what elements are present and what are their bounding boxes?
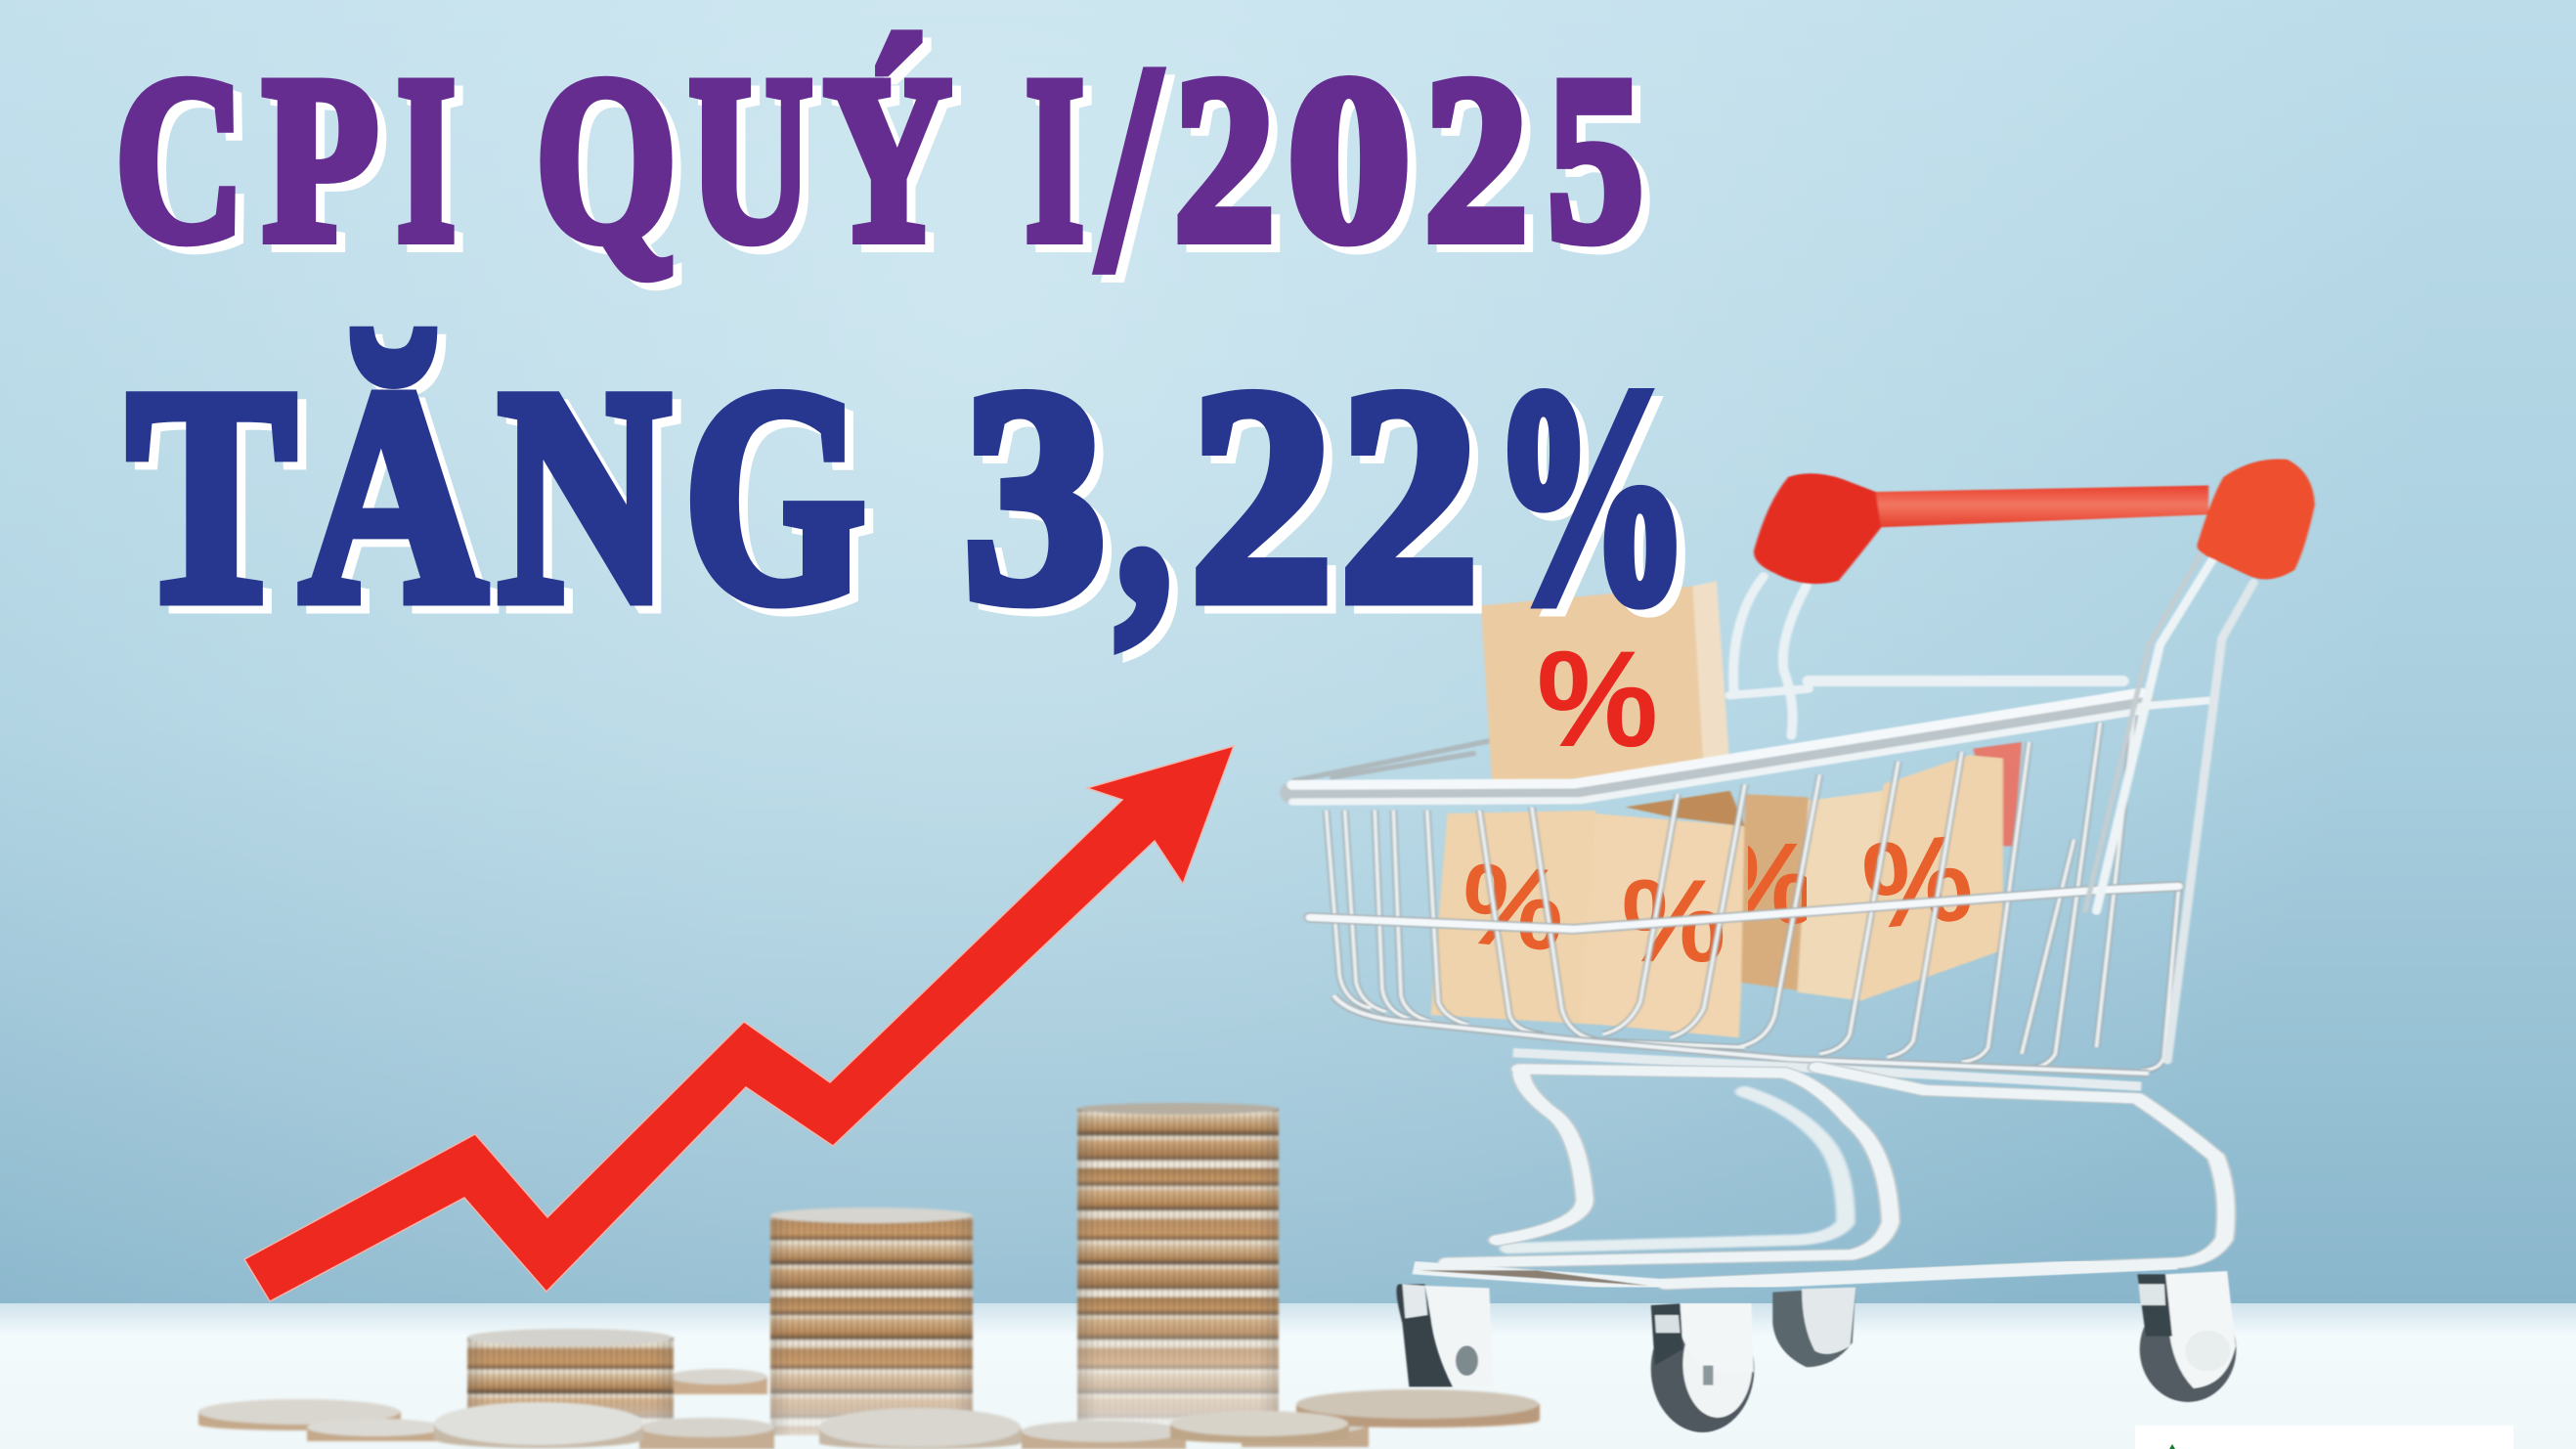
title line 2: % bbox=[1492, 328, 1690, 665]
dark top of lower boxes bbox=[1625, 791, 1745, 826]
title line 2 white shadow: , bbox=[1125, 335, 1181, 673]
right handle posts bbox=[2085, 553, 2253, 1061]
title line 1 white shadow: 5 bbox=[1556, 36, 1652, 298]
red rising arrow bbox=[244, 746, 1234, 1301]
short coin stack bbox=[467, 1329, 674, 1426]
title line 2: Ă bbox=[301, 328, 486, 665]
coin behind stacks bbox=[670, 1369, 767, 1394]
title line 2: 2 bbox=[1191, 328, 1332, 665]
title line 2 white shadow: 3 bbox=[973, 335, 1114, 673]
wood block right side bbox=[1797, 791, 1883, 1000]
small green mark bbox=[2169, 1444, 2175, 1449]
title line 1 white shadow: U bbox=[698, 36, 821, 298]
title line 1 white shadow: 2 bbox=[1183, 36, 1284, 298]
title line 2: , bbox=[1116, 328, 1172, 665]
basket rails bbox=[1292, 692, 2208, 929]
title line 1 white shadow: I bbox=[1034, 36, 1093, 298]
wood block back bbox=[1741, 794, 1809, 990]
title line 1: P bbox=[263, 28, 378, 290]
wheel front centre bbox=[1651, 1303, 1754, 1432]
title line 2: 2 bbox=[1340, 328, 1478, 665]
tall coin stack bbox=[1077, 1103, 1279, 1424]
title line 1: I bbox=[1026, 28, 1084, 290]
coin stacks bbox=[467, 1103, 1279, 1435]
title line 1 white shadow: Q bbox=[545, 36, 685, 298]
percent labels on wood blocks: % bbox=[1856, 810, 1979, 955]
white footer patch bbox=[2135, 1426, 2513, 1449]
wheel rear left bbox=[1396, 1284, 1493, 1386]
percent labels on wood blocks: % bbox=[1537, 622, 1658, 775]
shopping cart bbox=[1292, 459, 2315, 1432]
title line 2 white shadow: G bbox=[693, 335, 874, 673]
title line 1: C bbox=[115, 28, 244, 290]
title line 1: 2 bbox=[1174, 28, 1275, 290]
title line 2 white shadow: T bbox=[137, 335, 304, 673]
percent labels on wood blocks: % bbox=[1715, 819, 1816, 948]
tan box with percent, top bbox=[1481, 581, 1730, 784]
middle coin stack bbox=[770, 1208, 973, 1435]
wood block centre bbox=[1581, 813, 1749, 1037]
title line 2: T bbox=[128, 328, 295, 665]
percent labels on wood blocks bbox=[1457, 622, 1979, 987]
title line 1 white shadow: Ý bbox=[833, 36, 960, 298]
title line 2 white shadow: % bbox=[1501, 335, 1699, 673]
wheel rear centre bbox=[1772, 1288, 1856, 1367]
title line 1: 2 bbox=[1424, 28, 1528, 290]
title line 1 white shadow: P bbox=[272, 36, 387, 298]
chrome frame legs bbox=[1447, 1068, 2226, 1284]
rear handle posts bbox=[1730, 577, 2122, 735]
title line 1 white shadow: C bbox=[124, 36, 253, 298]
title line 2 white shadow: 2 bbox=[1349, 335, 1487, 673]
percent labels on wood blocks: % bbox=[1622, 856, 1725, 987]
title line 2 white shadow: 2 bbox=[1200, 335, 1341, 673]
red handle bbox=[1754, 459, 2315, 584]
title line 1 white shadow: / bbox=[1106, 13, 1171, 337]
title line 1: I bbox=[397, 28, 456, 290]
title bbox=[115, 5, 1699, 673]
cart front wires and handle bbox=[1292, 459, 2315, 1086]
title line 1 white shadow: 2 bbox=[1433, 36, 1537, 298]
cart rear wires and cargo bbox=[1292, 577, 2122, 1037]
small red block behind bbox=[1973, 742, 2022, 846]
table surface bbox=[0, 1303, 2576, 1449]
rear basket rim bbox=[1292, 741, 1491, 781]
title line 1: / bbox=[1097, 5, 1162, 329]
title line 2: N bbox=[499, 328, 670, 665]
loose coins bbox=[198, 1389, 1540, 1449]
title line 1: U bbox=[689, 28, 812, 290]
title line 1: 5 bbox=[1548, 28, 1643, 290]
wheel base strut bbox=[1414, 1263, 2177, 1286]
wood block left bbox=[1431, 811, 1599, 1025]
title line 2: G bbox=[684, 328, 865, 665]
title line 2: 3 bbox=[964, 328, 1106, 665]
title line 1 white shadow: I bbox=[406, 36, 464, 298]
wood block right bbox=[1860, 755, 2003, 1000]
title line 1: Ý bbox=[824, 28, 951, 290]
title line 2 white shadow: Ă bbox=[310, 335, 495, 673]
title line 2 white shadow: N bbox=[507, 335, 678, 673]
wheel front right bbox=[2137, 1271, 2236, 1402]
cart undercarriage bbox=[1396, 1068, 2236, 1432]
title line 1 white shadow: 0 bbox=[1296, 36, 1419, 298]
title line 1: Q bbox=[536, 28, 677, 290]
title line 1: 0 bbox=[1288, 28, 1411, 290]
basket vertical wires bbox=[1326, 716, 2179, 1071]
rear centre leg, out of focus bbox=[1509, 1092, 1846, 1249]
percent labels on wood blocks: % bbox=[1457, 839, 1570, 976]
basket bottom edge bbox=[1333, 995, 2149, 1086]
